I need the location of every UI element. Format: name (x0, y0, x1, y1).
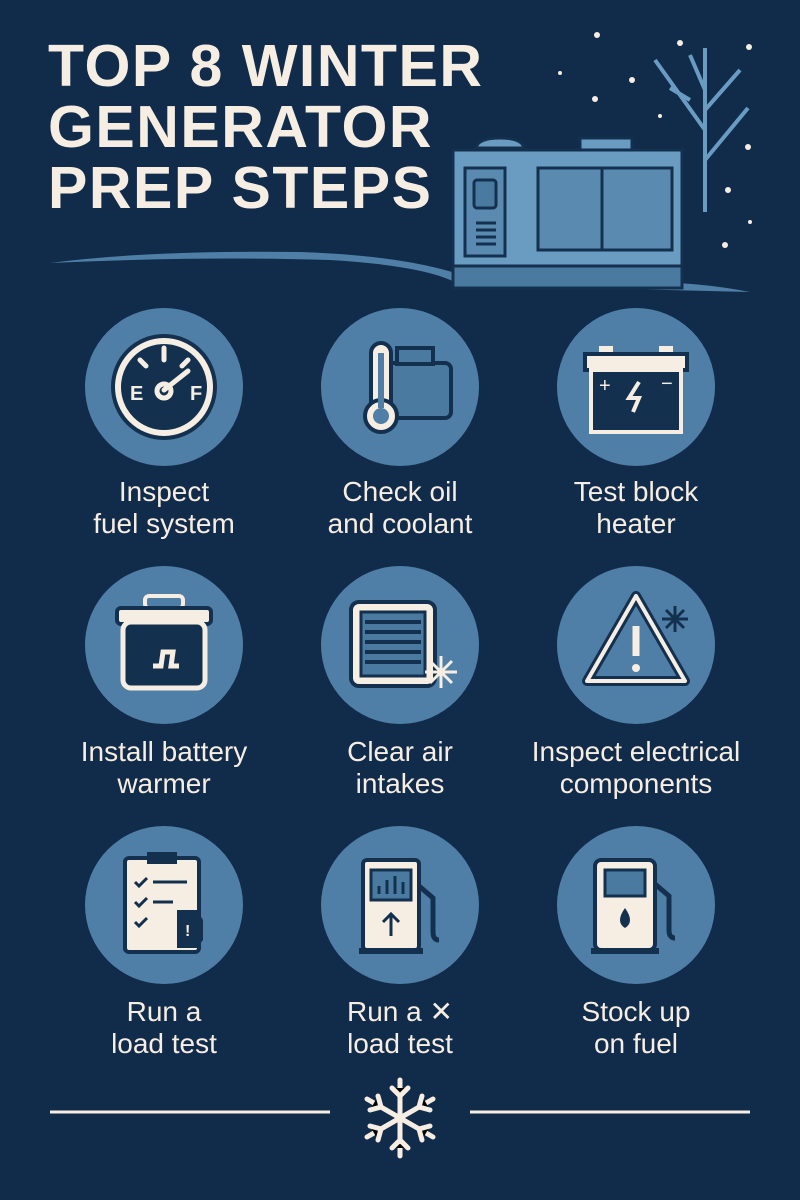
icon: fuel gauge: F (190, 383, 202, 405)
label: stock fuel: on fuel (594, 1028, 678, 1059)
title: TOP 8 WINTER (48, 33, 483, 99)
label: check oil: Check oil (342, 476, 458, 507)
label: block heater (574, 476, 698, 539)
label: air intakes: Clear air (347, 736, 453, 767)
title: GENERATOR (48, 94, 433, 160)
illustration: generator with tree and snow (50, 32, 752, 292)
label: stock fuel (582, 996, 690, 1059)
label: load test 1 (111, 996, 217, 1059)
icon: fuel pump drop (557, 826, 715, 984)
label: load test 2 (347, 996, 453, 1059)
icon: thermometer engine (321, 308, 479, 466)
label: inspect fuel: fuel system (93, 508, 235, 539)
icon: fuel pump chart (321, 826, 479, 984)
icon: battery warmer (85, 566, 243, 724)
label: electrical (532, 736, 740, 799)
label: air intakes (347, 736, 453, 799)
icon: battery: − (661, 373, 673, 395)
label: air intakes: intakes (356, 768, 444, 799)
icon: clipboard: ! (185, 923, 190, 940)
icon: battery: + (599, 375, 611, 397)
label: inspect fuel: Inspect (119, 476, 209, 507)
title (48, 33, 483, 221)
icon: clipboard (85, 826, 243, 984)
label: check oil: and coolant (328, 508, 472, 539)
label: electrical: Inspect electrical (532, 736, 740, 767)
title: PREP STEPS (48, 155, 432, 221)
label: load test 1: Run a (127, 996, 201, 1027)
label: load test 1: load test (111, 1028, 217, 1059)
label: load test 2: Run a ✕ (347, 996, 453, 1027)
label: battery warmer (81, 736, 248, 799)
label: battery warmer: Install battery (81, 736, 247, 767)
icon: fuel gauge (85, 308, 243, 466)
label: inspect fuel (93, 476, 235, 539)
label: battery warmer: warmer (117, 768, 211, 799)
label: block heater: heater (596, 508, 676, 539)
label: load test 2: load test (347, 1028, 453, 1059)
icon: battery (557, 308, 715, 466)
icon: air intake (321, 566, 479, 724)
icon: fuel gauge: E (130, 383, 143, 405)
label: electrical: components (560, 768, 712, 799)
icon: warning (557, 566, 715, 724)
footer: divider with snowflake (50, 1078, 750, 1158)
label: stock fuel: Stock up (582, 996, 690, 1027)
label: check oil (328, 476, 472, 539)
label: block heater: Test block (574, 476, 698, 507)
